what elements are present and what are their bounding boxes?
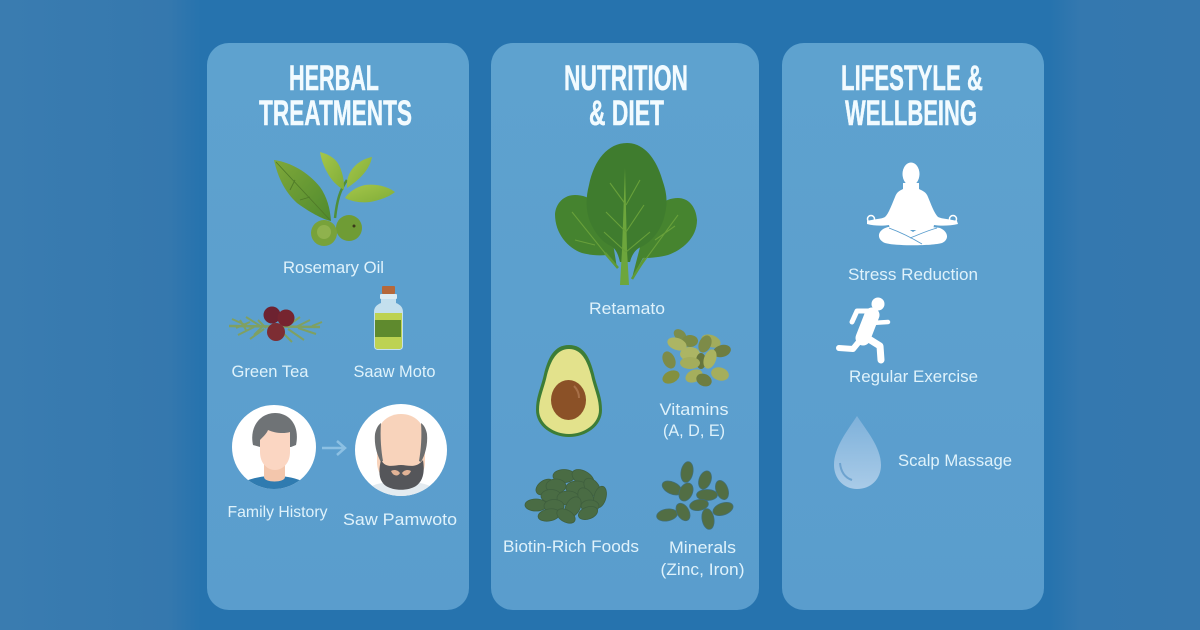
panel: nutrition and diet <box>491 43 759 610</box>
icon: mineral seeds <box>656 461 735 530</box>
label: vitamins A D E: (A, D, E) <box>663 421 725 440</box>
heading: lifestyle and wellbeing: LIFESTYLE & <box>841 59 983 98</box>
heading: lifestyle and wellbeing: WELLBEING <box>845 94 977 133</box>
icon: rosemary branch with berries <box>274 152 395 246</box>
arrow: progression <box>322 441 345 455</box>
label: minerals zinc iron: Minerals <box>669 538 736 557</box>
heading: herbal treatments: TREATMENTS <box>259 94 412 133</box>
avatar: balding bearded man <box>355 404 447 498</box>
icon: running figure <box>839 298 888 360</box>
label: biotin-rich foods: Biotin-Rich Foods <box>503 537 639 556</box>
avatar: young man with hair <box>232 405 316 492</box>
label: minerals zinc iron: (Zinc, Iron) <box>660 560 744 579</box>
panel: lifestyle and wellbeing <box>782 43 1044 610</box>
heading: nutrition and diet: NUTRITION <box>564 59 688 98</box>
icon: water drop <box>834 416 881 489</box>
label: regular exercise: Regular Exercise <box>849 367 978 386</box>
icon: spinach leaves <box>555 143 697 285</box>
heading: nutrition and diet: & DIET <box>589 94 664 133</box>
icon: meditating figure <box>867 162 958 245</box>
heading: nutrition and diet <box>564 59 688 133</box>
icon: vitamin seeds <box>660 327 732 389</box>
label: family history: Family History <box>228 504 328 521</box>
label: retamato: Retamato <box>589 299 665 318</box>
panel: herbal treatments <box>207 43 469 610</box>
label: rosemary oil: Rosemary Oil <box>283 258 384 277</box>
icon: biotin-rich seeds <box>525 466 609 526</box>
label: saw moto: Saaw Moto <box>354 362 436 381</box>
heading: lifestyle and wellbeing <box>841 59 983 133</box>
label: vitamins A D E <box>660 400 728 440</box>
label: scalp massage: Scalp Massage <box>898 451 1012 470</box>
label: minerals zinc iron <box>660 538 744 579</box>
label: green tea: Green Tea <box>232 362 309 381</box>
heading: herbal treatments <box>259 59 412 133</box>
icon: avocado half <box>536 345 602 437</box>
icon: sprig with red berries <box>229 306 322 342</box>
label: stress reduction: Stress Reduction <box>848 265 978 284</box>
label: vitamins A D E: Vitamins <box>660 400 728 419</box>
label: saw pamwoto: Saw Pamwoto <box>343 510 457 529</box>
heading: herbal treatments: HERBAL <box>289 59 379 98</box>
icon: green oil bottle <box>374 286 403 350</box>
